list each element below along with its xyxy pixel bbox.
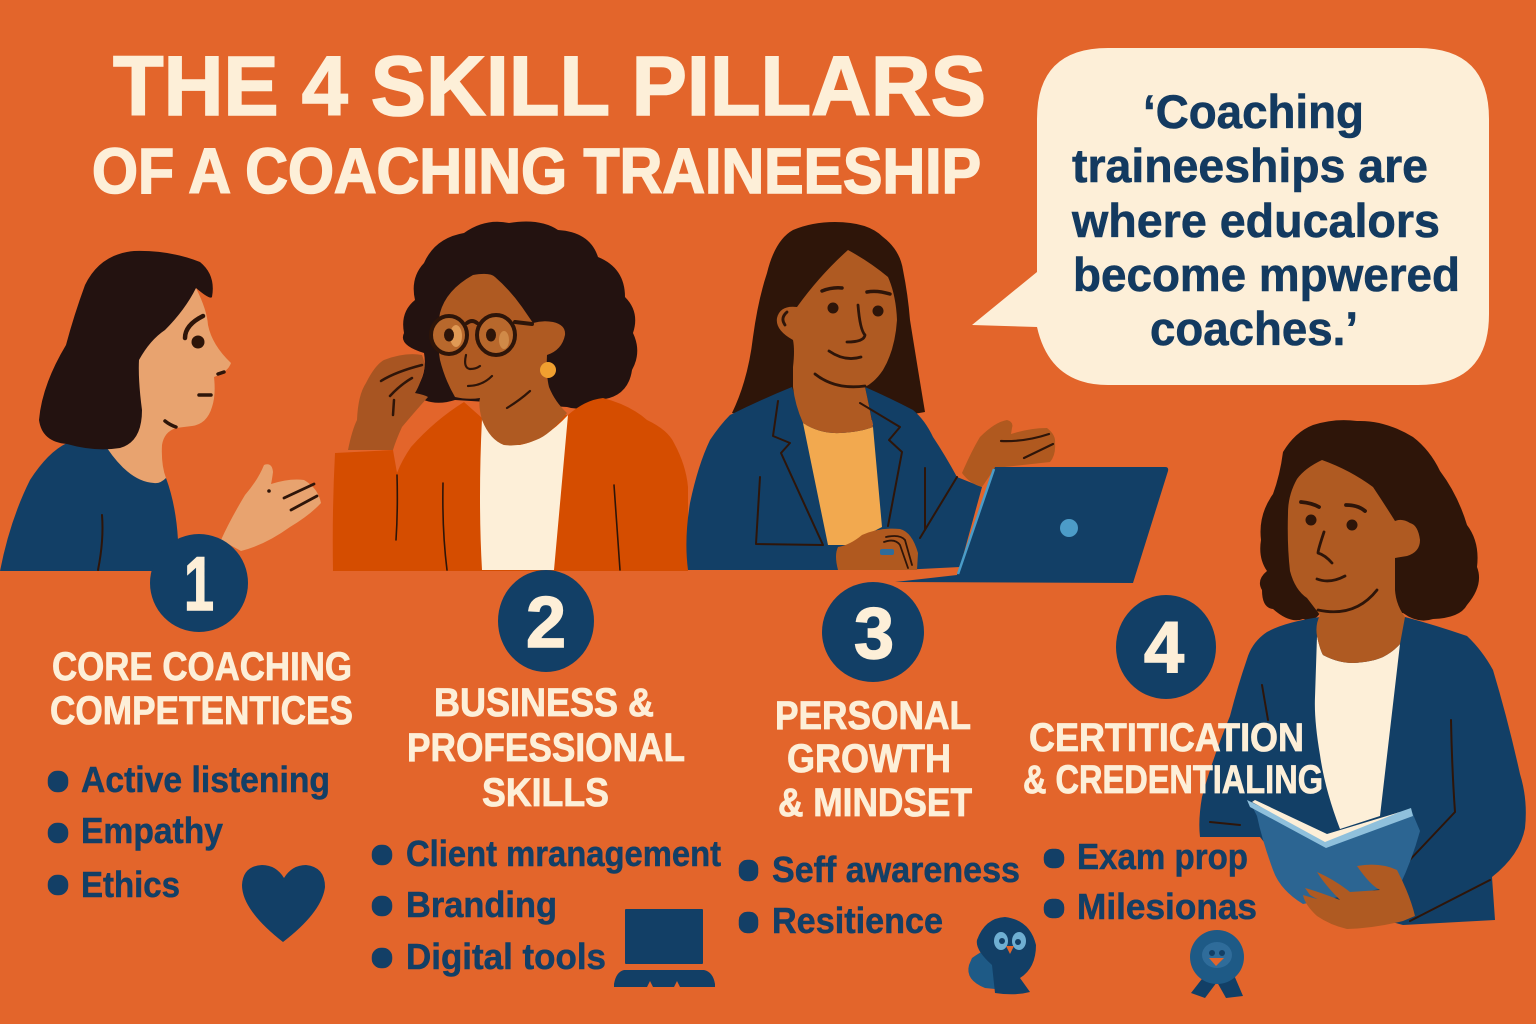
person 3: woman in navy blazer with laptop	[686, 222, 1168, 583]
speech bubble quote	[972, 48, 1489, 385]
icon: heart	[242, 865, 325, 942]
number badge 3: 3	[854, 594, 894, 674]
heading 3: GROWTH	[787, 737, 951, 781]
list 2: Digital tools	[406, 936, 606, 977]
heading 4: & CREDENTIALING	[1023, 758, 1323, 802]
heading 2: PROFESSIONAL	[407, 726, 685, 770]
heading 1: CORE COACHING	[52, 645, 352, 689]
person 2 raised hand	[348, 354, 428, 450]
title: OF A COACHING TRAINEESHIP	[92, 135, 981, 207]
book-holding hand	[1303, 865, 1415, 929]
title	[92, 39, 986, 207]
list 3: Resitience	[772, 900, 943, 941]
list 1: Active listening	[81, 759, 330, 800]
icon: laptop	[614, 909, 715, 987]
heading 2: BUSINESS &	[434, 681, 654, 725]
list 2: Client mranagement	[406, 833, 721, 874]
list 1: Empathy	[81, 810, 223, 851]
list 1: Ethics	[81, 864, 180, 905]
speech bubble quote: ‘Coaching	[1143, 85, 1364, 138]
speech bubble quote: where educalors	[1071, 194, 1440, 247]
number badge 2	[498, 570, 594, 672]
pillar 1	[48, 534, 353, 942]
number badge 2: 2	[526, 583, 566, 663]
person 3 gesturing hand	[962, 420, 1055, 487]
heading 4	[1023, 716, 1323, 802]
list 2: Branding	[406, 884, 557, 925]
list 3	[739, 849, 1020, 941]
speech bubble quote: traineeships are	[1072, 139, 1428, 192]
list 2	[372, 833, 721, 977]
heading 3: & MINDSET	[778, 781, 972, 825]
icon: owl badge 4	[1190, 930, 1244, 998]
speech bubble quote: coaches.’	[1150, 302, 1358, 355]
icon: owl badge 3	[968, 917, 1036, 994]
number badge 1: 1	[184, 542, 214, 627]
heading 1	[50, 645, 353, 733]
pillar 4	[1023, 595, 1323, 998]
heading 2	[407, 681, 685, 815]
heading 3: PERSONAL	[775, 694, 971, 738]
list 1	[48, 759, 330, 905]
heading 2: SKILLS	[482, 771, 609, 815]
person 4: woman holding open book	[1199, 420, 1526, 929]
title: THE 4 SKILL PILLARS	[113, 39, 986, 133]
pillar 2	[372, 570, 721, 987]
speech bubble quote: become mpwered	[1073, 248, 1460, 301]
person 1 hand	[221, 464, 321, 551]
open book	[1252, 806, 1420, 904]
number badge 4: 4	[1144, 608, 1184, 688]
number badge 4	[1116, 595, 1216, 699]
heading 1: COMPETENTICES	[50, 689, 353, 733]
person 1: profile woman in navy top	[0, 251, 321, 571]
number badge 3	[822, 582, 924, 682]
list 4: Exam prop	[1077, 836, 1248, 877]
person 3 typing hand	[836, 529, 918, 570]
pillar 3	[739, 582, 1036, 994]
heading 4: CERTITICATION	[1029, 716, 1304, 760]
list 4	[1044, 836, 1257, 927]
person 2: woman with glasses in orange cardigan	[333, 222, 688, 571]
heading 3	[775, 694, 972, 825]
laptop	[895, 467, 1168, 583]
list 4: Milesionas	[1077, 886, 1257, 927]
list 3: Seff awareness	[772, 849, 1020, 890]
number badge 1	[150, 534, 248, 632]
